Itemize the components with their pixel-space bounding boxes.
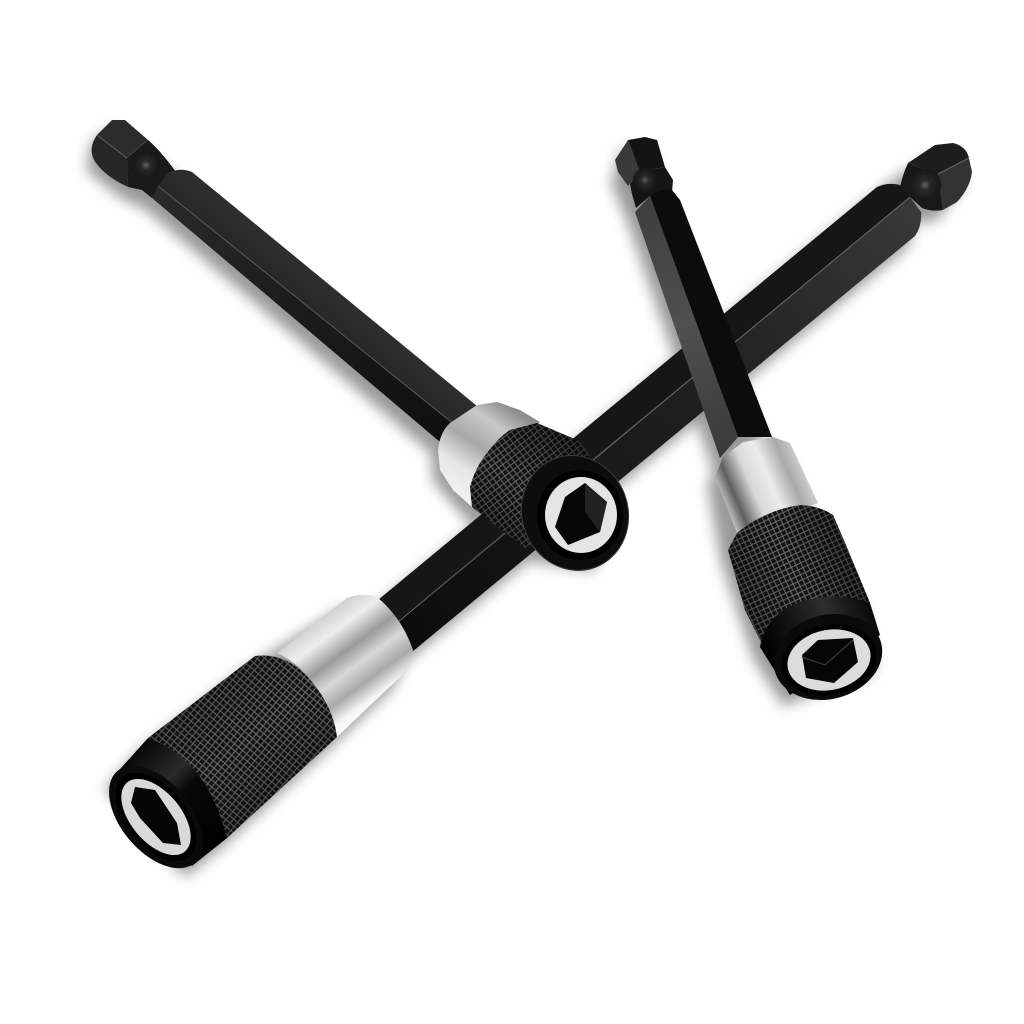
knurled grip: long holder <box>148 656 337 838</box>
tool: right holder <box>615 137 892 712</box>
soft drop shadows <box>87 131 965 877</box>
tip: hex end of upper left holder <box>92 120 176 198</box>
shank: long holder <box>378 184 921 652</box>
knurled grip: right holder <box>728 505 870 650</box>
silver sleeve: upper left holder <box>438 402 540 507</box>
silver sleeve: long holder <box>277 595 413 737</box>
silver sleeve: right holder <box>715 437 818 533</box>
black collar and socket: right holder <box>760 596 892 712</box>
tool: long holder running to lower left <box>91 143 972 885</box>
black collar and socket: upper left holder <box>505 440 645 586</box>
black collar and socket: long holder <box>91 738 227 885</box>
tool: upper left holder <box>92 120 645 586</box>
shank: right holder <box>635 190 772 458</box>
tip: hex end of right holder <box>615 137 673 208</box>
shank: upper left holder <box>152 170 477 442</box>
knurled grip: upper left holder <box>470 423 590 548</box>
tip: hex end of long holder <box>900 143 972 211</box>
